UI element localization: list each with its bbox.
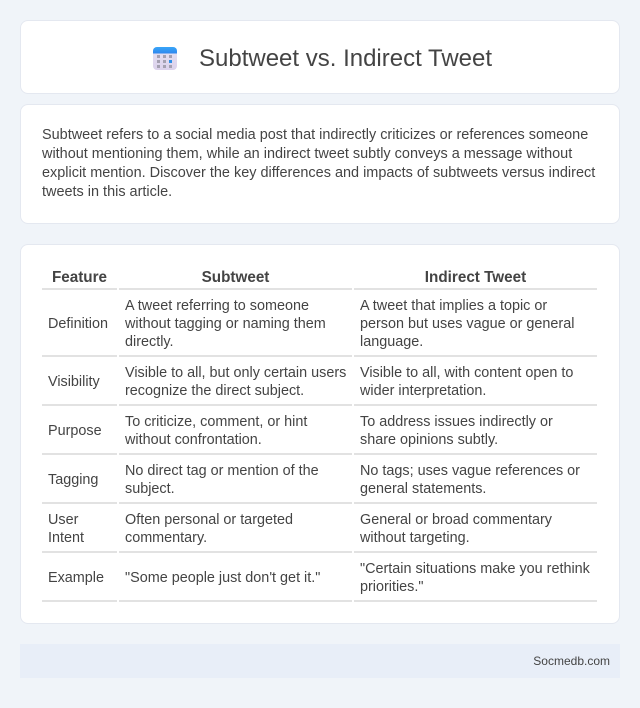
row: purpose [48, 414, 553, 448]
comparison table [42, 269, 597, 602]
header row: Feature [52, 269, 107, 286]
row: tagging: Tagging [48, 472, 98, 488]
row: definition: A tweet that implies a topic or [360, 298, 547, 314]
row: visibility: wider interpretation. [360, 383, 486, 399]
intro text: tweets in this article. [42, 184, 172, 200]
row: visibility: recognize the direct subject. [125, 383, 304, 399]
intro text: explicit mention. Discover the key differences and impacts of subtweets versus indirect [42, 165, 595, 181]
header row: Indirect Tweet [425, 269, 526, 286]
row: purpose: To address issues indirectly or [360, 414, 553, 430]
row: example: priorities." [360, 579, 424, 595]
title panel [20, 20, 620, 94]
row: user intent: General or broad commentary [360, 512, 552, 528]
row: example: Example [48, 570, 104, 586]
row: visibility: Visible to all, but only certain users [125, 365, 346, 381]
footer bar [20, 644, 620, 678]
row: user intent [48, 512, 552, 546]
footer credit: Socmedb.com [533, 654, 610, 668]
row: user intent: User [48, 512, 78, 528]
row: definition: directly. [125, 334, 174, 350]
row: visibility: Visibility [48, 374, 100, 390]
row: definition: Definition [48, 316, 108, 332]
row: example: "Some people just don't get it." [125, 570, 320, 586]
intro panel [20, 104, 620, 224]
row: tagging: No direct tag or mention of the [125, 463, 319, 479]
row: purpose: Purpose [48, 423, 102, 439]
row: tagging: subject. [125, 481, 175, 497]
row: tagging [48, 463, 580, 497]
table panel [20, 244, 620, 624]
row: definition: language. [360, 334, 423, 350]
header row: Subtweet [202, 269, 269, 286]
row: definition: without tagging or naming them [125, 316, 326, 332]
row: definition [48, 298, 574, 350]
header row [52, 269, 526, 286]
row: purpose: share opinions subtly. [360, 432, 498, 448]
icon: calendar [153, 47, 177, 70]
row: visibility [48, 365, 573, 399]
row: tagging: No tags; uses vague references or [360, 463, 580, 479]
title: Subtweet vs. Indirect Tweet [199, 45, 492, 72]
row: definition: person but uses vague or general [360, 316, 574, 332]
intro text: without mentioning them, while an indirect tweet subtly conveys a message without [42, 146, 572, 162]
row: user intent: without targeting. [360, 530, 470, 546]
row: user intent: Intent [48, 530, 84, 546]
row: purpose: To criticize, comment, or hint [125, 414, 307, 430]
intro text [42, 127, 596, 200]
row: tagging: general statements. [360, 481, 486, 497]
row: definition: A tweet referring to someone [125, 298, 309, 314]
intro text: Subtweet refers to a social media post that indirectly criticizes or references someone [42, 127, 588, 143]
row: purpose: without confrontation. [125, 432, 262, 448]
row: visibility: Visible to all, with content open to [360, 365, 573, 381]
row: user intent: commentary. [125, 530, 207, 546]
row: example: "Certain situations make you rethink [360, 561, 590, 577]
row: example [48, 561, 590, 595]
row: user intent: Often personal or targeted [125, 512, 293, 528]
